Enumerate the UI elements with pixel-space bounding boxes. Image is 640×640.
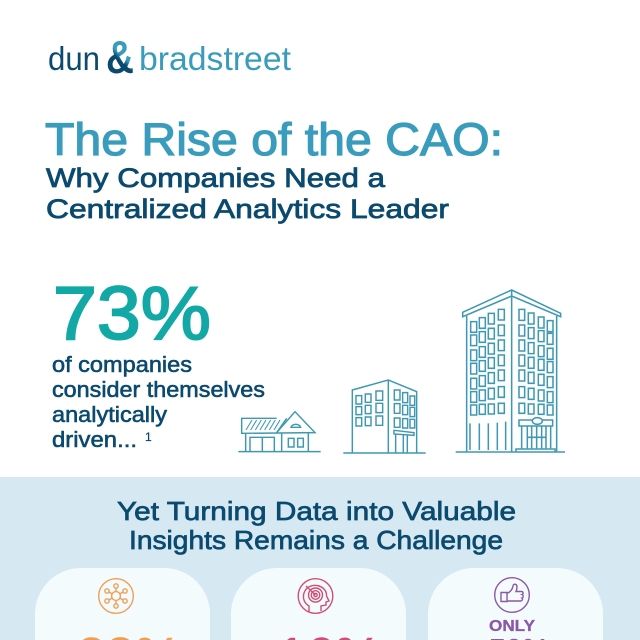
statistic description: analytically (52, 402, 167, 427)
statistic description: of companies (52, 352, 192, 377)
statistic description: driven... (52, 427, 137, 452)
logo: dun & bradstreet (48, 31, 291, 83)
logo: dun & bradstreet: bradstreet (139, 40, 291, 77)
label: only: ONLY (489, 618, 535, 635)
title: The Rise of the CAO: (45, 114, 503, 165)
title: Centralized Analytics Leader (46, 194, 449, 224)
icon: network (99, 579, 133, 613)
title: Why Companies Need a (46, 163, 386, 193)
icon: thumbs up (495, 578, 529, 612)
icon: small house (238, 412, 321, 452)
section heading: Insights Remains a Challenge (129, 525, 503, 555)
logo: dun & bradstreet: dun (48, 40, 100, 77)
panel: challenge band (0, 477, 640, 640)
section heading: Yet Turning Data into Valuable (117, 496, 516, 526)
statistic description (52, 352, 265, 452)
logo: dun & bradstreet: & (106, 31, 134, 83)
statistic description: 1 (145, 430, 152, 444)
section heading (117, 496, 516, 555)
icon: head with target (298, 579, 333, 613)
big statistic: 73%: 73% (53, 271, 211, 355)
card: pink statistic (231, 568, 406, 640)
card: purple statistic (428, 568, 603, 640)
title (45, 114, 503, 224)
icon: mid-size office building (343, 380, 426, 453)
statistic description: consider themselves (52, 377, 265, 402)
card: orange statistic (35, 568, 210, 640)
icon: tall office tower (456, 290, 565, 452)
